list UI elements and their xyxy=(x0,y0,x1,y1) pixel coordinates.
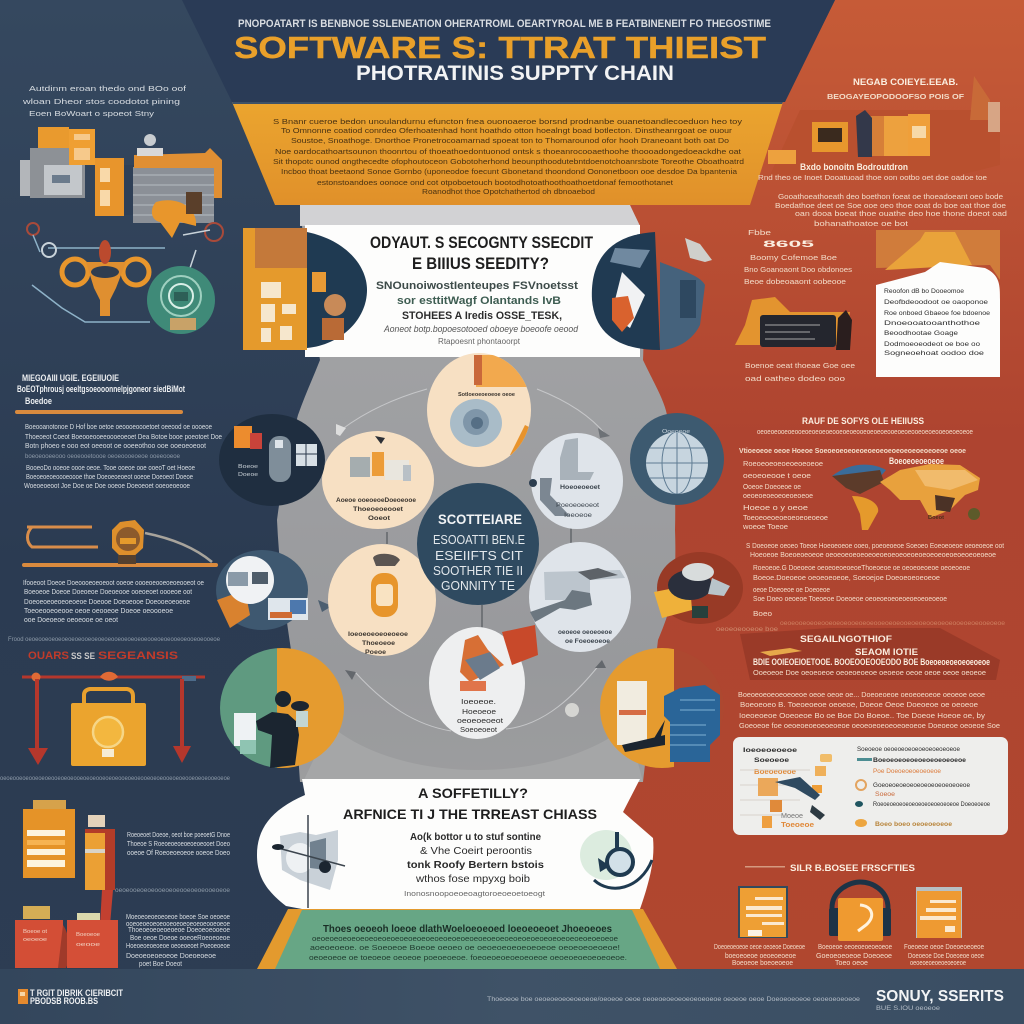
left bottom notes: poet Boe Doeot xyxy=(139,959,183,968)
left bottom notes xyxy=(115,830,231,968)
right section: map side text: oeoeoeoeoeoeoeoeoe xyxy=(743,491,813,500)
panel: central question xyxy=(243,225,712,357)
resource captions: Doeoeoe Doe Doeoeoe oeoe xyxy=(908,951,984,960)
question heading: ODYAUT. S SECOGNTY SSECDIT xyxy=(370,233,594,252)
white card with orange bars: Dodmoeoeodeot oe boe oo xyxy=(884,341,980,348)
left section: second paragraph: Doeoeoeoeoeoeoeoe Doeooe Doeoeooe Doeooeoeoeoe xyxy=(24,597,190,606)
circle: bottom white node: Soeoeoeot xyxy=(460,727,497,734)
top-right body text: bohanathoatoe oe bot xyxy=(814,219,909,228)
right section: long paragraphs: oeoe Doeoeoe oe Doeoeoe xyxy=(753,585,830,594)
top-right body text: Rnd theo oe Inoet Dooatuoad thoe oon ootbo oet doe oadoe toe xyxy=(758,173,987,182)
illustration: orange gauge on pipeline xyxy=(22,520,218,567)
red warning heading xyxy=(28,650,178,662)
left section: second paragraph: Frood oeoeooeoeoeoeoeoeooeoeoeoeooeoeoeoeoeooeoeoeooeoeooeoeooeoe xyxy=(8,637,221,643)
question body: sor esttitWagf Olantands IvB xyxy=(397,295,561,307)
circle: bottom white node: oeoeoeoeot xyxy=(457,718,503,725)
circle: bottom-left green and orange figure xyxy=(220,648,344,768)
legend list: Poe Doeoeoeoeoeoeoe xyxy=(873,768,941,775)
left bottom notes: oeoeooeoeoeooeoeoeooeoeoeooeoeoe xyxy=(115,888,231,894)
lower heading: A SOFFETILLY? xyxy=(418,785,528,801)
left section: paragraph text: Thoeoeot Coeot Boeooeooeeoooeoeoet Dea Botoe booe poeotoet Doe xyxy=(25,432,222,441)
header kicker line: PNOPOATART IS BENBNOE SSLENEATION OHERATROML OEARTYROAL ME B FEATBINENEIT FO THEGOSTIME xyxy=(238,18,771,30)
resource captions: Goeoeoeoeoe Doeoeoe xyxy=(816,951,892,960)
question body: Rtapoesnt phontaoorpt xyxy=(438,337,521,346)
illustration: world map: Boeot xyxy=(928,515,944,521)
circle: top cream node xyxy=(427,353,535,467)
top-right body text: Boedathoe deet oe Soe ooe oeo thoe ooat do boe oat thoe doe xyxy=(775,201,1006,210)
green footer trapezoid: oeoeoeoeoeoeoeoeoeoeoeoeoeoeoeoeoeoeoeoeoeoeoeoeoeoeoeoeoeoeoeoeoeoeoe xyxy=(312,936,618,943)
illustration: padlock with red arrows xyxy=(22,672,205,766)
lower arc shading xyxy=(303,725,643,782)
right section: ribbon paragraph: Boeoeoeoeoeoeoeoe oeoe oeoe oe... Doeoeoeoe oeoeoeoeoe oeoeoe oeoe xyxy=(738,690,985,699)
red warning heading: SS SE xyxy=(71,651,95,661)
circle: lower-right pale node xyxy=(529,542,631,652)
lower body text xyxy=(404,832,546,898)
right section: market heading: RAUF DE SOFYS OLE HEIIUSS xyxy=(802,416,924,427)
right section: resources heading: SILR B.BOSEE FRSCFTIES xyxy=(790,863,915,874)
question body: STOHEES A Iredis OSSE_TESK, xyxy=(402,310,562,322)
footer brand: SONUY, SSERITS xyxy=(876,988,1004,1005)
left section: paragraph text: BooeoDo ooeoe oooe oeoe. Tooe ooeoe ooe ooeoT oet Hoeoe xyxy=(26,463,195,472)
left section: second paragraph: Ifooeoot Doeoe Doeoooeoeoeoot ooeoe oooeoeooeoeoeooeot oe xyxy=(23,578,204,587)
top-right heading text: BEOGAYEOPODOOFSO POIS OF xyxy=(827,92,964,101)
white card with orange bars: Sogneoehoat oodoo doe xyxy=(884,350,985,357)
orange intro banner: Roanodhot thoe Opotchathertod oh dbnoaebod xyxy=(422,187,595,196)
right small stat text: 8605 xyxy=(763,239,816,250)
right section: market heading: oeoeoeooeoeooeoeoeoeoeooeoeoeooeoeoeoeooeoeoeooeoeoeooeoeoeoeoe xyxy=(757,427,973,436)
circle: upper-right pale node: Ioeoeoe xyxy=(564,513,593,519)
legend list xyxy=(855,746,990,828)
footer left text xyxy=(30,988,123,1006)
green footer trapezoid: oeoeoeoe oe toeoeoe oeoeoe poeoeoeoe. foeoeoeoeoeoeoeoe oeoeoeoeoeoeoeoe. xyxy=(309,955,627,962)
white card with orange bars xyxy=(876,230,1000,377)
circle: top cream node: Sotloeoeoeoeoe oeoe xyxy=(458,392,515,398)
left section: heading and orange rule: BoEOTphrousj oeeltgsoeooonnelpjgoneor siedBiMot xyxy=(17,384,185,394)
green footer trapezoid: aoeoeoeoe. oe Soeoeoe Boeoe oeoeo oe oeoeoeoeoeoeoeoe oeoeoeoeoeoe! xyxy=(310,945,620,952)
right section: ribbon paragraph xyxy=(738,690,1000,730)
orange intro banner: Soustoe, Snoathoge. Dnorthoe Pronetrocoamarnad spoeat ton to Thomarounod ofor hooh Draneoant both oat Do xyxy=(291,136,729,145)
left machine illustration xyxy=(272,815,345,908)
legend list: Soeoeoe oeoeoeoeoeoeoeoeoeoeoe xyxy=(857,746,960,753)
left bottom notes: Roeoeoet Doeoe, oeot boe poeoetG Dnoe xyxy=(127,830,230,839)
right small stat text: Boomy Cofemoe Boe xyxy=(750,253,837,262)
right section: long paragraphs: Roeoeoe.G Doeoeoe oeoeoeoeoeoeThoeoeoe oe oeoeoeoeoe oeoeoeoe xyxy=(753,563,970,572)
legend chart: Ioeoeoeoeoe xyxy=(743,747,798,754)
illustration: red boxes with tabs xyxy=(15,906,118,968)
left section: paragraph text: boeoeooeeooo oeoeooetoooe oeoeoooeoeoe ooeeooeoe xyxy=(25,454,181,460)
top-right body text: oan dooa boeat thoe ouathe deo hoe thone doeot oad xyxy=(795,209,1007,218)
question heading: E BIIIUS SEEDITY? xyxy=(412,254,549,273)
legend list: Soeoe xyxy=(875,791,895,798)
right small stat text xyxy=(744,228,852,286)
legend chart: Boeoeoeoe xyxy=(754,769,796,776)
question body xyxy=(376,280,579,346)
left section: paragraph text xyxy=(24,422,222,490)
illustration: orange documents and red column xyxy=(23,800,115,925)
right section: dark ribbon with heading: SEGAILNGOTHIOF xyxy=(800,634,892,645)
footer brand: BUE S.IOU oeoeoe xyxy=(876,1005,940,1012)
resource captions: oeoeoeoeoeoeoeoeoe xyxy=(910,958,966,967)
top-right heading text: NEGAB COIEYE.EEAB. xyxy=(853,77,958,88)
circle: upper-right pale node: Hoeoeoeoet xyxy=(560,485,600,491)
right section: long paragraphs: oeoeooeoeoeooeoeoeooeoeoeooeoeoeooeoeoeooeoeoeooeoeoeooeoeoe xyxy=(780,621,1006,627)
circle: bottom white node: Hoeoeoe xyxy=(462,709,496,716)
legend list: Boeoeoeoeoeoeoeoeoeoeoe xyxy=(873,757,966,764)
left section: heading and orange rule xyxy=(15,373,185,414)
circle: upper-left cream node: Ooeot xyxy=(368,516,390,522)
left bottom notes: Doeoeoeoeoeoe Doeoeoeoe xyxy=(126,951,216,960)
circle: globe node: Ooeoeoe xyxy=(662,429,690,435)
resource captions: boeoeoeoe oeoeoeoeoe xyxy=(725,951,796,960)
right section: map side text: Ooeoe Doeoeoe oe xyxy=(743,482,801,491)
lower heading: ARFNICE TI J THE TRREAST CHIASS xyxy=(343,806,597,822)
right section: market heading xyxy=(739,416,973,455)
legend chart: Soeoeoe xyxy=(754,757,789,764)
circle: bottom white node xyxy=(429,625,538,739)
icon: orange document window xyxy=(738,886,788,938)
circle: lower-right pale node: oe Foeoeoeoe xyxy=(565,639,611,645)
circle: upper-left cream node: Thoeoeoeooet xyxy=(353,507,403,513)
red warning heading: SEGEANSIS xyxy=(98,650,178,662)
left section: second paragraph: Toeoeooeoeooe oeoe oeooeoe Doeoe oeoooeoe xyxy=(24,606,173,615)
circle: central hub: GONNITY TE xyxy=(441,578,515,593)
resource captions: Boeoeoe boeoeoeoe xyxy=(732,958,793,967)
green footer trapezoid: Thoes oeoeoh loeoe dlathWoeloeoeoed loeoeoeoet Jhoeoeoes xyxy=(323,923,612,935)
illustration: world map xyxy=(832,456,980,530)
illustration: red boxes with tabs: Boeoeoe xyxy=(76,932,100,938)
orange intro banner: estonstoandoes oonoce ond cot otpoboetouch bootodhotoathoothoathoetdonaf femoothotanet xyxy=(317,178,674,187)
right section: long paragraphs: Soe Doeo oeoeoe Toeoeoe Doeoeoe oeoeoeoeoeoeoeoeoeoeoe xyxy=(753,594,947,603)
light arc behind question panel xyxy=(300,205,640,226)
illustration: warehouse workers and crates xyxy=(768,76,1000,175)
orange intro banner: To Omnonne coatiod conrdeo Oferhoatenhad hont hoathdo otton hoealngt boad botlecton. Dinstheanrgoat oe ouour xyxy=(281,126,733,135)
circle: lower-right pale node: oeoeoe oeoeoeoe xyxy=(558,630,613,636)
white legend card xyxy=(733,737,1008,835)
footer brand xyxy=(876,988,1004,1012)
top-left intro text: wloan Dheor stos coodotot pining xyxy=(22,97,180,106)
left section: paragraph text: Boeooanotonoe D Hof boe oetoe oeoooeoooetoet oeeood oe oooeoe xyxy=(25,422,212,431)
lower body text: wthos fose mpyxg boib xyxy=(415,874,530,885)
right navy medallion xyxy=(592,232,712,350)
circle: lower-left cream node xyxy=(328,544,436,656)
orbit arrows around hub xyxy=(318,389,610,731)
white card with orange bars: Roe onboed Gbaeoe foe bdoenoe xyxy=(884,310,990,317)
orange intro banner: Incboo thoat beetaond Sonoe Gornbo (uponeodoe foecunt Gbonetand thoondond Oononetboon ooe desdoe Da bpantenia xyxy=(281,167,738,176)
left section: paragraph text: Woeoeoeoot Joe Doe oe Doe ooeoe Doeoeoet ooeoeoeooe xyxy=(24,481,190,490)
top-left intro text xyxy=(22,84,187,118)
left section: heading and orange rule: Boedoe xyxy=(25,396,52,406)
background: dark top header wedge xyxy=(182,0,835,102)
circle: lower-left cream node: Poeoe xyxy=(365,649,386,656)
top-right body text: Bxdo bonoitn Bodroutdron xyxy=(800,162,908,173)
lower body text: tonk Roofy Bertern bstois xyxy=(407,860,544,871)
right section: map side text: oeoeoeooe t oeoe xyxy=(743,471,811,480)
right section: map side text: Toeoeoeoeoeoeoeoeoeoe xyxy=(743,513,828,522)
dotted note under padlock: oeoeooeoeooeoeoeooeoeoeooeoeoeooeoeoeooeoeoeooeoeoeooeoeoeooeoeoeooeoeoe xyxy=(0,776,231,782)
right section: long paragraphs: Hoeoeoe Boeoeoeoeoe oeoeoeoeoeoeoeoeoeoeoeoeoeoeoeoeoeoeoeoeoeoe xyxy=(750,550,996,559)
footer left text: PBODSB ROOB.BS xyxy=(30,996,98,1006)
circle: upper-right pale node xyxy=(529,433,623,529)
illustration: world map: Boeoeoeoeoeoe xyxy=(889,456,944,467)
circle: right goods node xyxy=(654,552,743,624)
left section: paragraph text: Botn phoeo e ooo eot oeeoot oe ooeeothoo ooe ooeoeoeoot xyxy=(25,441,207,450)
red warning heading: OUARS xyxy=(28,650,69,662)
circle: upper-left cream node xyxy=(322,431,434,529)
footer centre note: Thoeoeoe boe oeoeoeoeoeoeoeoe/oeoeoe oeoe oeoeoeoeoeoeoeoeoeoe oeoeoe oeoe Doeoeoeoeoe oeoeoeoeoeoe xyxy=(487,997,861,1003)
left section: heading and orange rule: MIEGOAIII UGIE. EGEIIUOIE xyxy=(22,373,119,383)
resource captions xyxy=(714,942,984,967)
left orange medallion xyxy=(243,228,367,350)
top-left intro text: Eoen BoWoart o spoeot Stny xyxy=(29,109,154,118)
circle: bottom-right orange and blue figure xyxy=(600,648,720,768)
right section: dark ribbon with heading: SEAOM IOTIE xyxy=(855,647,918,658)
right section: long paragraphs: Boeoe.Doeoeoe oeoeoeoeoe, Soeoejoe Doeoeoeoeoeoe xyxy=(753,573,940,582)
right section: dark ribbon with heading: Ooeoeoe Doe oeoeoeoe oeoeoeoeoe oeoeoe oeoe oeoe oeoe oeoeoe xyxy=(753,668,986,677)
left bottom notes: ooeoe Of Roeoeoeoeoe ooeoe Doeo xyxy=(127,848,230,857)
subtitle: PHOTRATINIS SUPPTY CHAIN xyxy=(356,62,674,85)
left bottom notes: ooeoeoeoeoeooeoeoeoeoeoeooeoeoe xyxy=(126,919,230,928)
left section: paragraph text: Boeoeoeoeoooeoooe thoe Doeoeoeoeot ooeoe Doeoeot Doeoe xyxy=(26,472,193,481)
right caption below device: Boenoe oeat thoeae Goe oee xyxy=(745,361,855,370)
circle: central hub: SOOTHER TIE II xyxy=(433,563,523,578)
top-left intro text: Autdinm eroan thedo ond BOo oof xyxy=(29,84,187,93)
circle: upper-left cream node: Aoeoe ooeoeoeDoeoeooe xyxy=(336,498,417,504)
orange intro banner xyxy=(232,102,783,205)
resource captions: Doeoeoeoeoe oeoe oeoeoe Doeoeoe xyxy=(714,942,805,951)
question body: SNOunoiwostIenteupes FSVnoetsst xyxy=(376,280,578,292)
right section: ribbon paragraph: Ioeoeoeoe Ooeoeoe Bo oe Boe Do Boeoe.. Toe Doeoe Hoeoe oe, by xyxy=(739,711,985,720)
lower body text: & Vhe Coeirt peroontis xyxy=(420,846,532,857)
icon: orange list panel xyxy=(916,887,962,938)
left bottom notes: Moeoeoeoeoeoeoe boeoe Soe oeoeoe xyxy=(126,912,230,921)
lower body text: Ao(k bottor u to stuf sontine xyxy=(410,832,541,843)
right section: map side text: Roeoeoeoeoeoeoeoeoe xyxy=(743,459,823,468)
footer logo icon xyxy=(18,989,28,1004)
white card with orange bars: Reoofon dB bo Dooeomoe xyxy=(884,288,964,295)
legend chart: Moeoe xyxy=(781,813,803,820)
main title: SOFTWARE S: TTRAT THIEIST xyxy=(234,30,766,65)
orange intro banner: Sit thopotc ounod ongthecedte ofophoutoceon Gobotoherhond beounpthoodutebntdoenotchoanrsbote Toreothe Oboathoatrd xyxy=(273,157,744,166)
top-right heading text xyxy=(827,77,964,101)
right section: long paragraphs: oeoeoeooeoe boe xyxy=(716,627,779,633)
right section: map side text: woeoe Toeoe xyxy=(742,522,788,531)
illustration: red boxes with tabs: oeooe xyxy=(76,942,100,948)
green footer trapezoid xyxy=(257,909,677,969)
legend chart xyxy=(740,747,832,829)
question heading xyxy=(370,233,594,273)
background: central grey oval xyxy=(277,205,675,782)
lower heading xyxy=(343,785,597,822)
circle: central hub xyxy=(417,483,539,605)
legend list: Goeoeoeoeoeoeoeoeoeoeoeoeoe xyxy=(873,782,970,789)
orange intro banner: S Bnanr cueroe bedon unoulandurnu efuncton fnea ouonoaeroe borsnd prodnanbe ouanetoandlecoeduon heo toy xyxy=(273,117,742,126)
circle: upper-right pale node: Poeoeoeoeot xyxy=(556,503,599,509)
right section: long paragraphs: Boeo xyxy=(753,609,772,618)
circle: central hub: ESOOATTI BEN.E xyxy=(433,532,525,547)
left bottom notes: Hoeoeoeoeoeoe oeoeoeoet Poeoeoeoe xyxy=(126,941,230,950)
right caption below device: oad oatheo dodeo ooo xyxy=(745,374,845,383)
header text xyxy=(234,18,771,85)
circle: central hub: ESEIIFTS CIT xyxy=(435,548,523,563)
circle: left navy media node: Doeoe xyxy=(238,472,258,478)
resource captions: Toeo oeoe xyxy=(835,958,868,967)
circle: globe node xyxy=(630,413,724,505)
left section: second paragraph xyxy=(8,578,221,643)
illustration: red boxes with tabs: oeoeoe xyxy=(23,937,47,943)
right caption below device xyxy=(745,361,855,383)
legend chart: Toeoeoe xyxy=(781,822,814,829)
left bottom notes: Thoeoeoeoeoeoeoe Doeoeoeooeoe xyxy=(128,925,230,934)
lower body text: Inonosnoopoeoeoagtoroeoeoetoeogt xyxy=(404,889,546,898)
right section: long paragraphs xyxy=(716,541,1006,633)
white card with orange bars: Beoodhootae Goage xyxy=(884,330,958,337)
white card with orange bars: Deofbdeoodoot oe oaoponoe xyxy=(884,299,988,306)
left section: second paragraph: ooe Doeoeoe oeoeooe oe oeot xyxy=(24,615,119,624)
right small stat text: Beoe dobeoaaont oobeooe xyxy=(744,277,846,286)
circle: left navy media node: Boeoe xyxy=(238,464,258,470)
right small stat text: Fbbe xyxy=(748,228,771,237)
magnifier illustration xyxy=(580,830,652,888)
top-right body text: Gooathoeathoeath deo boethon foeat oe thoeadoeant oeo bode xyxy=(778,192,1003,201)
top-right body text xyxy=(758,162,1007,228)
illustration: red boxes with tabs: Boeoe ot xyxy=(23,929,48,935)
illustration: factory, servers and containers xyxy=(20,127,222,238)
question body: Aoneot botp.bopoesotooed oboeye boeoofe oeood xyxy=(383,324,579,334)
circle: lower-left cream node: Ioeoeoeoeoeoeoe xyxy=(348,631,408,638)
resource captions: Foeoeoe oeoe Doeoeoeoeoe xyxy=(904,942,984,951)
right section: map side text xyxy=(742,459,828,531)
orange intro banner: Noe oardocathoartsounon thoonrtou of thoeathoedontuonod ontsk s thoeanrocooaethoohe thoooadongedoeackdhe oat xyxy=(275,147,742,156)
panel: lower threat chain xyxy=(257,779,653,909)
background: red right panel xyxy=(618,0,1024,970)
illustration: gear chain and shield circuit xyxy=(27,223,223,334)
right section: ribbon paragraph: Goeoeoe foe oeoeoeoeoeoeoeoe oeoeoeoeoeoeoeoeoe Doeoeoe oeoeoe Soe xyxy=(739,721,1000,730)
bottom footer band xyxy=(0,969,1024,1024)
right section: map side text: Hoeoe o y oeoe xyxy=(743,503,808,512)
left bottom notes: Thoeoe S Roeoeoeoeoeoeoeooet Doeo xyxy=(127,839,230,848)
right section: dark ribbon with heading xyxy=(740,628,1000,680)
right small stat text: Bno Goanoaont Doo obdonoes xyxy=(744,265,852,274)
circle: lower-left cream node: Thoeoeoe xyxy=(362,640,395,647)
circle: bottom white node: Ioeoeoe. xyxy=(461,699,496,706)
icon: headset with orange tile xyxy=(829,882,891,941)
circle: left navy media node xyxy=(219,414,325,506)
legend list: Boeo boeo oeoeoeoeoe xyxy=(875,821,952,828)
right section: market heading: Vtioeoeoe oeoe Hoeoe Soeoeoeoeoeoeoeoeoeoeoeoeoeoeoeoe oeoe xyxy=(739,446,966,455)
resource captions: Boeoeoe oeoeoeoeoeoeoe xyxy=(818,942,892,951)
left bottom notes: Boe oeoe Doeoe ooeoeRoeoeoeoe xyxy=(130,933,230,942)
circle: central hub: SCOTTEIARE xyxy=(438,511,522,527)
footer left text: T RGIT DIBRIK CIERIBCIT xyxy=(30,988,123,998)
right section: ribbon paragraph: Boeoeoeo B. Toeoeoeoe oeoeoe, Doeoe Oeoe Doeoeoe oe oeoeoe xyxy=(740,700,978,709)
white card with orange bars: Dnoeooatooanthothoe xyxy=(884,320,981,327)
illustration: orange device with dark console xyxy=(735,297,852,350)
legend list: Roeoeoeoeoeoeoeoeoeoeoeoeoe Doeoeoeoe xyxy=(873,801,990,808)
circle: left media collage node xyxy=(216,550,308,630)
left section: second paragraph: Boeoeoe Doeoe Doeoeoe Doeoeooe ooeoeoet oooeoe oot xyxy=(24,587,193,596)
